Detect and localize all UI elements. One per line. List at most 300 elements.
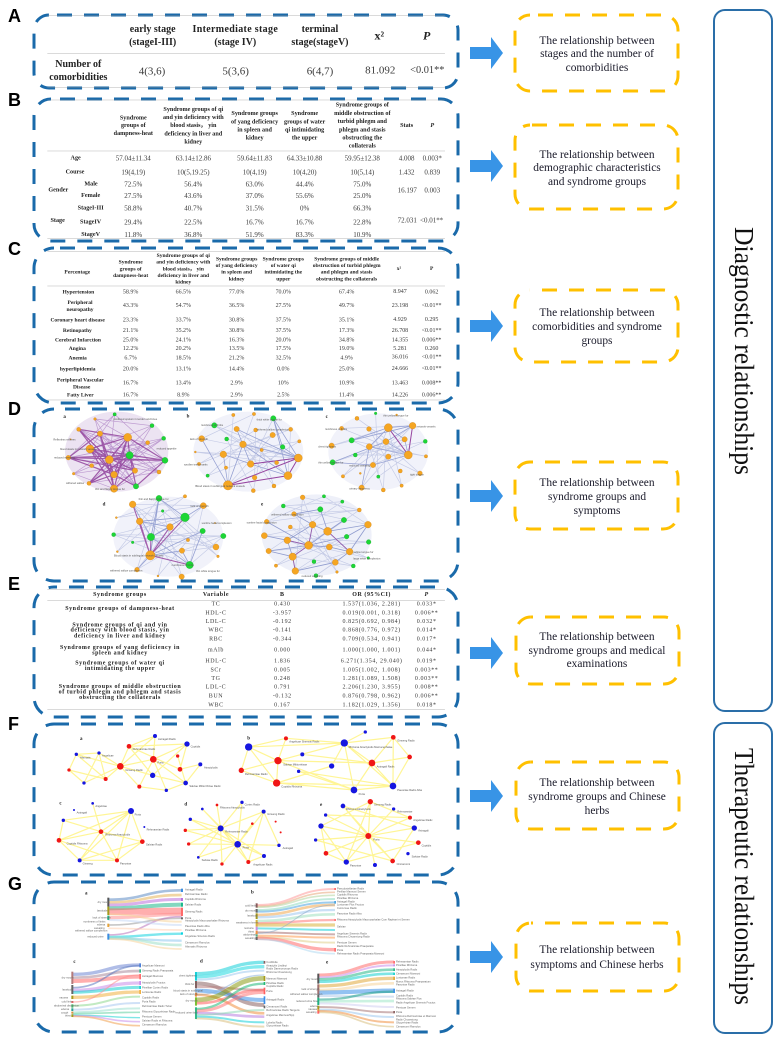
table C: 13.4% <box>176 380 191 386</box>
sankey a: Salviae Radix <box>185 903 202 907</box>
table C: and yin deficiency with <box>156 260 210 266</box>
table C: Fatty Liver <box>67 393 94 399</box>
table E: mAlb <box>208 648 224 654</box>
network e: e <box>261 502 264 507</box>
sankey b: Pinelliae Rhizoma <box>337 896 359 900</box>
table E: 0.006** <box>415 693 438 699</box>
network a: a <box>63 415 66 420</box>
table C: 34.8% <box>339 337 354 343</box>
table B: 40.7% <box>184 205 203 213</box>
herb network c: Salviae Radix <box>146 843 163 847</box>
sankey a: numbness of limbs <box>83 919 106 923</box>
sankey d: Rehmanniae Radix Tangeris <box>266 1008 300 1012</box>
arrow D <box>470 480 503 512</box>
herb network c: Rhizoma Atractylodis <box>105 833 131 837</box>
herb network c: Astragali <box>77 810 87 814</box>
table B: 16.197 <box>398 186 417 194</box>
table E: BUN <box>209 693 223 699</box>
table E: 0.005 <box>274 667 290 673</box>
herb network d: d <box>184 803 187 808</box>
sankey e: Astragali Radix <box>396 989 414 993</box>
table B: Age <box>71 156 81 162</box>
table B: Syndrome groups <box>231 111 278 117</box>
network d: thin and flappy tongue fur <box>139 497 169 501</box>
sankey d: Pinelliae Radix <box>266 981 285 985</box>
callout B: The relationship between <box>539 149 655 161</box>
table C: 20.0% <box>276 337 291 343</box>
herb network a: Salviae Miltiorrhizae Radix <box>189 784 221 788</box>
table E: HDL-C <box>205 659 227 665</box>
callout F: The relationship between <box>539 777 655 789</box>
sankey b: b <box>251 891 254 896</box>
table B: 63.14±12.86 <box>176 155 211 163</box>
table B: Syndrome groups of <box>336 103 390 109</box>
sankey d: Atractylis Lindleyi <box>266 963 287 967</box>
table B: 10(4,20) <box>293 168 317 176</box>
sankey c: Atractylodis Fructus <box>142 981 166 985</box>
table C: 43.3% <box>123 303 138 309</box>
sankey c: Rehmanniae Radix Tuber <box>142 1004 172 1008</box>
table E: 0.167 <box>274 702 290 708</box>
table B: 10(4,19) <box>243 168 267 176</box>
table B: 0.003 <box>424 186 441 194</box>
network b: swollen teeth-marks <box>184 462 208 466</box>
network e: sombre facial complexion <box>247 520 277 524</box>
table E: intimidating the upper <box>85 666 155 672</box>
table C: 16.7% <box>123 380 138 386</box>
sankey d: reduced urine faint <box>176 1010 198 1014</box>
sankey d: Coptidis Radix <box>266 984 284 988</box>
table E: Syndrome groups <box>93 592 147 598</box>
herb network b: Ginseng Radix <box>397 738 415 742</box>
panel A border <box>34 15 458 88</box>
sankey d: Lobelia Radix <box>266 1020 283 1024</box>
herb network d: Poria <box>243 845 249 849</box>
table C: kidney <box>229 276 245 282</box>
table C: intimidating the <box>264 270 303 276</box>
table C: 6.7% <box>124 355 137 361</box>
category box: diagnostic relationships <box>714 10 772 711</box>
callout B: and syndrome groups <box>548 176 647 188</box>
table C: 13.1% <box>176 366 191 372</box>
sankey d: Rhizoma Chuanxiong <box>266 970 292 974</box>
category box: therapeutic relationships: Therapeutic relationships <box>729 748 759 1005</box>
sankey a: Ginseng Radix <box>185 910 203 914</box>
sankey a: reduced urine <box>87 935 104 939</box>
table C: 10.9% <box>339 380 354 386</box>
network b: thick white tongue fur <box>257 417 282 421</box>
table C: and phlegm and stasis <box>321 270 372 276</box>
sankey a: lassitude <box>97 909 108 913</box>
sankey e: nausea <box>308 1008 318 1011</box>
callout C: comorbidities and syndrome <box>532 321 662 333</box>
sankey b: Astragali Radix <box>337 899 356 903</box>
table C: 17.5% <box>276 346 291 352</box>
sankey d: Angelicae Mannosi/Spp <box>266 1013 295 1017</box>
sankey c <box>54 960 176 1027</box>
herb network e: Astragali <box>418 829 429 833</box>
sankey a: withered sallow complexion <box>75 929 108 933</box>
table C: 8.9% <box>177 393 190 399</box>
arrow A <box>470 37 503 69</box>
panel D border <box>34 409 458 581</box>
sankey c: cough <box>61 1010 69 1014</box>
table B: 57.04±11.34 <box>116 155 151 163</box>
table C: 25.0% <box>339 366 354 372</box>
sankey b: Salviae <box>337 925 346 929</box>
table C: 11.4% <box>339 393 354 399</box>
sankey d: dry mouth <box>186 999 198 1003</box>
table E: -0.344 <box>273 637 292 643</box>
table A: x² <box>374 28 384 42</box>
sankey e: Paeoniae Radix <box>396 983 415 987</box>
herb network e: e <box>320 803 323 808</box>
sankey c: Persicae Semen <box>142 1015 162 1019</box>
table B: 10.9% <box>353 231 371 239</box>
table B: 75.0% <box>353 180 371 188</box>
arrow C <box>470 310 503 342</box>
table C: 14.355 <box>392 337 408 343</box>
network b: numbness of limbs <box>201 423 224 427</box>
sankey a: Astragali Radix <box>185 888 204 892</box>
herb network d <box>184 801 293 867</box>
table A: 6(4,7) <box>307 65 334 77</box>
herb network d: Angelicae Radix <box>253 863 273 867</box>
table B: 0.839 <box>424 168 441 176</box>
table B: phlegm and stasis <box>339 127 386 133</box>
table B: StageV <box>81 232 101 238</box>
network c <box>318 412 436 492</box>
herb network e: Angelicae Radix <box>413 818 433 822</box>
table B <box>47 100 445 239</box>
table E: 0.019(0.001, 0.318) <box>343 609 401 616</box>
callout A: comorbidities <box>566 62 629 74</box>
table C: P <box>430 266 434 272</box>
sankey b: Curcumae Radix <box>337 906 357 910</box>
sankey e: Cinnamomi Mannosi <box>396 971 421 975</box>
sankey c: Poria Radix <box>142 999 156 1003</box>
herb network e: Poria <box>373 837 380 841</box>
table E: 0.008** <box>415 684 438 690</box>
letter B: B <box>8 90 21 110</box>
table A: (stageI-III) <box>129 37 176 48</box>
panel F border <box>34 724 458 875</box>
sankey c: Ginseng Radix Praeparata <box>142 969 174 973</box>
table C: Retinopathy <box>63 328 92 334</box>
table E: WBC <box>208 702 224 708</box>
table B: groups of <box>121 123 147 129</box>
herb network d: Cortex Radix <box>245 803 261 807</box>
table E: B <box>280 592 285 598</box>
table E: OR (95%CI) <box>352 591 391 598</box>
table C: 16.7% <box>123 393 138 399</box>
callout F <box>516 762 679 829</box>
table B: of yang deficiency <box>231 119 279 125</box>
panel C: comorbidities table <box>8 239 458 403</box>
sankey b: Perillae Mannosi Semen <box>337 889 366 893</box>
table C: 26.708 <box>392 328 408 334</box>
table C: 54.7% <box>176 303 191 309</box>
network a: reduced appetite <box>157 447 177 451</box>
letter D: D <box>8 399 21 419</box>
herb network e: Coptidis <box>422 843 432 847</box>
table E: deficiency in liver and kidney <box>74 633 166 639</box>
sankey b: Persicae Semen <box>337 941 357 945</box>
table B: 4.008 <box>399 155 415 163</box>
network e: withered sallow complexion <box>271 513 304 517</box>
sankey e: Atractylodis Radix <box>396 967 418 971</box>
table C: 13.5% <box>229 346 244 352</box>
callout B <box>515 125 678 209</box>
table C: 58.9% <box>123 290 138 296</box>
category box: diagnostic relationships: Diagnostic relationships <box>729 227 759 475</box>
network e: large white complexion <box>353 557 381 561</box>
table C: upper <box>276 276 291 282</box>
herb network b: b <box>247 737 250 742</box>
table C: 14.4% <box>229 366 244 372</box>
sankey d: d <box>200 959 203 964</box>
sankey d: Mannosi Mannosi <box>266 976 288 980</box>
table B: StageI-III <box>78 206 104 212</box>
sankey b: lassitude <box>247 914 258 918</box>
network c: thin yellow tongue fur <box>318 460 344 464</box>
letter C: C <box>8 239 21 259</box>
table B: the upper <box>292 135 318 141</box>
sankey e: Lonicerae Radix <box>396 975 416 979</box>
table C: Peripheral <box>67 300 93 306</box>
network b: Blood stasis in sublingual network vessels <box>195 484 245 488</box>
sankey e: reduced urine flow <box>296 999 318 1003</box>
table E: Syndrome groups of qi and yin <box>72 622 168 628</box>
panel C border <box>34 248 458 403</box>
sankey c: abdominal distension <box>54 1004 79 1008</box>
network c: chest tightness <box>318 444 337 448</box>
table B: 11.8% <box>124 231 142 239</box>
sankey a <box>75 888 229 949</box>
table B: kidney <box>184 140 203 146</box>
callout D <box>515 462 678 529</box>
table C: hyperlipidemia <box>60 366 96 372</box>
table C: 0.0% <box>277 366 290 372</box>
table C: 25.0% <box>123 337 138 343</box>
table C: 0.006** <box>422 393 441 399</box>
table E: TG <box>211 676 221 682</box>
table A: Number of <box>55 59 102 70</box>
network b: withered sallow complexion <box>257 428 289 432</box>
table C: 2.5% <box>277 393 290 399</box>
table B: kidney <box>246 135 264 141</box>
table B: 19(4,19) <box>121 168 146 176</box>
network d <box>103 495 232 579</box>
table C: Syndrome groups <box>263 256 304 262</box>
table C: 33.7% <box>176 318 191 324</box>
table B: 59.95±12.38 <box>345 155 380 163</box>
callout F: syndrome groups and Chinese <box>528 791 666 803</box>
network b <box>184 412 303 493</box>
table B: obstructing the <box>342 135 382 141</box>
sankey c: dry mouth <box>62 976 74 980</box>
table E: HDL-C <box>205 610 227 616</box>
table C: 67.4% <box>339 290 354 296</box>
table C: Angina <box>69 346 86 352</box>
panel B: demographic table <box>8 90 458 241</box>
table B: 16.7% <box>296 219 314 227</box>
sankey b: dry mouth <box>245 908 257 912</box>
herb network e <box>314 799 433 867</box>
table B: dampness-heat <box>114 131 154 137</box>
sankey b: sweating <box>245 936 256 940</box>
sankey b <box>236 887 410 955</box>
table E: 0.014* <box>417 628 437 634</box>
sankey a: a <box>85 891 88 896</box>
sankey e: Cinnamomi Ramulus <box>396 1025 421 1029</box>
table E: 0.430 <box>274 602 290 608</box>
table C: <0.01** <box>422 328 442 334</box>
sankey e: Rhizoma Rehmanniae et Mannosi <box>396 1014 436 1018</box>
table C: Percentage <box>64 270 91 276</box>
table A: 4(3,6) <box>139 65 166 77</box>
table B: 72.5% <box>124 180 143 188</box>
table C: 21.1% <box>123 328 138 334</box>
table C: x² <box>397 266 402 272</box>
table B: and yin deficiency with <box>163 115 224 121</box>
table E: 0.248 <box>274 676 290 682</box>
table B: Stage <box>50 218 65 224</box>
table C: Coronary heart disease <box>50 318 105 324</box>
table E: 1.005(1.002, 1.008) <box>343 666 401 673</box>
herb network d: Ginseng Radix <box>267 812 285 816</box>
herb network e: Rhizoma Atractylodis <box>346 807 371 811</box>
herb network a: Poria <box>157 761 164 765</box>
table E: 1.000(1.000, 1.001) <box>343 647 401 654</box>
sankey b: thirst <box>248 929 254 933</box>
network c: c <box>326 415 329 420</box>
table B: middle obstruction of <box>334 111 391 117</box>
table C: Syndrome groups <box>216 256 257 262</box>
table B: 63.0% <box>246 180 264 188</box>
table E: Syndrome groups of middle obstruction <box>59 684 181 690</box>
table C: <0.01** <box>422 366 442 372</box>
sankey e: Radix Chuanxiong <box>396 1017 418 1021</box>
sankey e: Rhizoma Salviae Flos <box>396 997 422 1001</box>
sankey c: Cinnamomi Ramulus <box>142 1023 167 1027</box>
table C: 20.0% <box>123 366 138 372</box>
sankey e: sweating <box>306 1010 317 1014</box>
letter E: E <box>8 574 20 594</box>
table B: 22.8% <box>353 219 371 227</box>
table E: 1.281(1.089, 1.508) <box>343 675 401 682</box>
sankey d: Poria <box>266 989 273 993</box>
table C: 24.666 <box>392 366 408 372</box>
sankey e: Rehmanniae Radix <box>396 960 419 964</box>
sankey a: sweating <box>94 926 105 930</box>
sankey d: Radix Daemonorops Radix <box>266 967 299 971</box>
panel E: regression table <box>8 574 458 717</box>
table C: Cerebral Infarction <box>55 337 101 343</box>
herb network a <box>67 734 221 792</box>
table C: 35.1% <box>339 318 354 324</box>
sankey e: lack of strength <box>302 987 320 991</box>
sankey a: Atractylodis Macrocephalae Rhizoma <box>185 919 229 923</box>
table C: 70.0% <box>276 290 291 296</box>
herb network a: Astragali Radix <box>158 737 177 741</box>
table C: Syndrome groups of middle <box>314 256 380 262</box>
sankey b: Paeoniae Radix Alba <box>337 911 362 915</box>
table E: -0.192 <box>273 619 292 625</box>
callout D: The relationship between <box>539 477 655 489</box>
callout C: groups <box>581 335 613 347</box>
callout G: symptoms and Chinese herbs <box>530 959 664 971</box>
table E: 0.033* <box>417 602 437 608</box>
table C: 23.198 <box>392 303 408 309</box>
sankey c: edema <box>61 1007 70 1011</box>
table C: 24.1% <box>176 337 191 343</box>
sankey a: Poria <box>185 916 192 920</box>
table C: 30.8% <box>229 318 244 324</box>
table E: 0.044* <box>417 648 437 654</box>
table E: 0.018* <box>417 702 437 708</box>
table C: 32.5% <box>276 355 291 361</box>
table B: in spleen and <box>237 127 272 133</box>
table E <box>47 589 445 709</box>
network e <box>247 494 381 578</box>
sankey e: edema <box>310 1004 319 1008</box>
sankey a: Rehmanniae Radix <box>185 892 208 896</box>
callout E <box>516 617 679 684</box>
table E: P <box>425 592 429 598</box>
table B: 10(5,14) <box>350 168 375 176</box>
table C: 0.008** <box>422 380 441 386</box>
table E: 0.003** <box>415 667 438 673</box>
sankey b: Rehmanniae Radix Praeparata Mannosi <box>337 951 385 955</box>
table E: obstructing the collaterals <box>79 695 161 701</box>
herb network b: Rhizoma Atractylodis Macrocephalae <box>349 745 393 749</box>
sankey e: e <box>326 960 329 965</box>
table E: 1.537(1.036, 2.281) <box>343 601 401 608</box>
sankey b: Angelicae Sinensis Radix <box>337 931 368 935</box>
table E: 0.019* <box>417 659 437 665</box>
herb network e: Rehmanniae <box>397 809 413 813</box>
table B: 51.9% <box>246 231 264 239</box>
sankey e: Poria <box>396 1010 403 1014</box>
table E: 2.206(1.230, 3.955) <box>343 683 401 690</box>
table B: 27.5% <box>124 192 143 200</box>
table C: 18.5% <box>176 355 191 361</box>
network e: yellow tongue fur <box>353 550 373 554</box>
sankey a: lack of strength <box>93 915 111 919</box>
network a: reduced sweating <box>54 456 75 460</box>
sankey e: Persicae Semen <box>396 1005 416 1009</box>
network b: b <box>187 414 190 419</box>
table C: Anemia <box>69 355 87 361</box>
arrow G <box>470 941 503 973</box>
network a: thin and flappy tongue fur <box>95 487 125 491</box>
sankey b: Poria <box>337 948 344 952</box>
table E: WBC <box>208 628 224 634</box>
table E: Syndrome groups of yang deficiency in <box>60 645 180 651</box>
table C: 16.3% <box>229 337 244 343</box>
table E: LDL-C <box>206 684 226 690</box>
table E: 1.836 <box>274 659 290 665</box>
table B: 0.003* <box>423 155 442 163</box>
table C: 0.295 <box>425 317 438 323</box>
sankey c: nausea <box>59 996 69 999</box>
panel G border <box>34 882 458 1032</box>
callout E: syndrome groups and medical <box>529 645 665 657</box>
herb network c: c <box>59 801 62 806</box>
table B: groups of water <box>284 119 326 125</box>
table E: Variable <box>203 592 229 598</box>
